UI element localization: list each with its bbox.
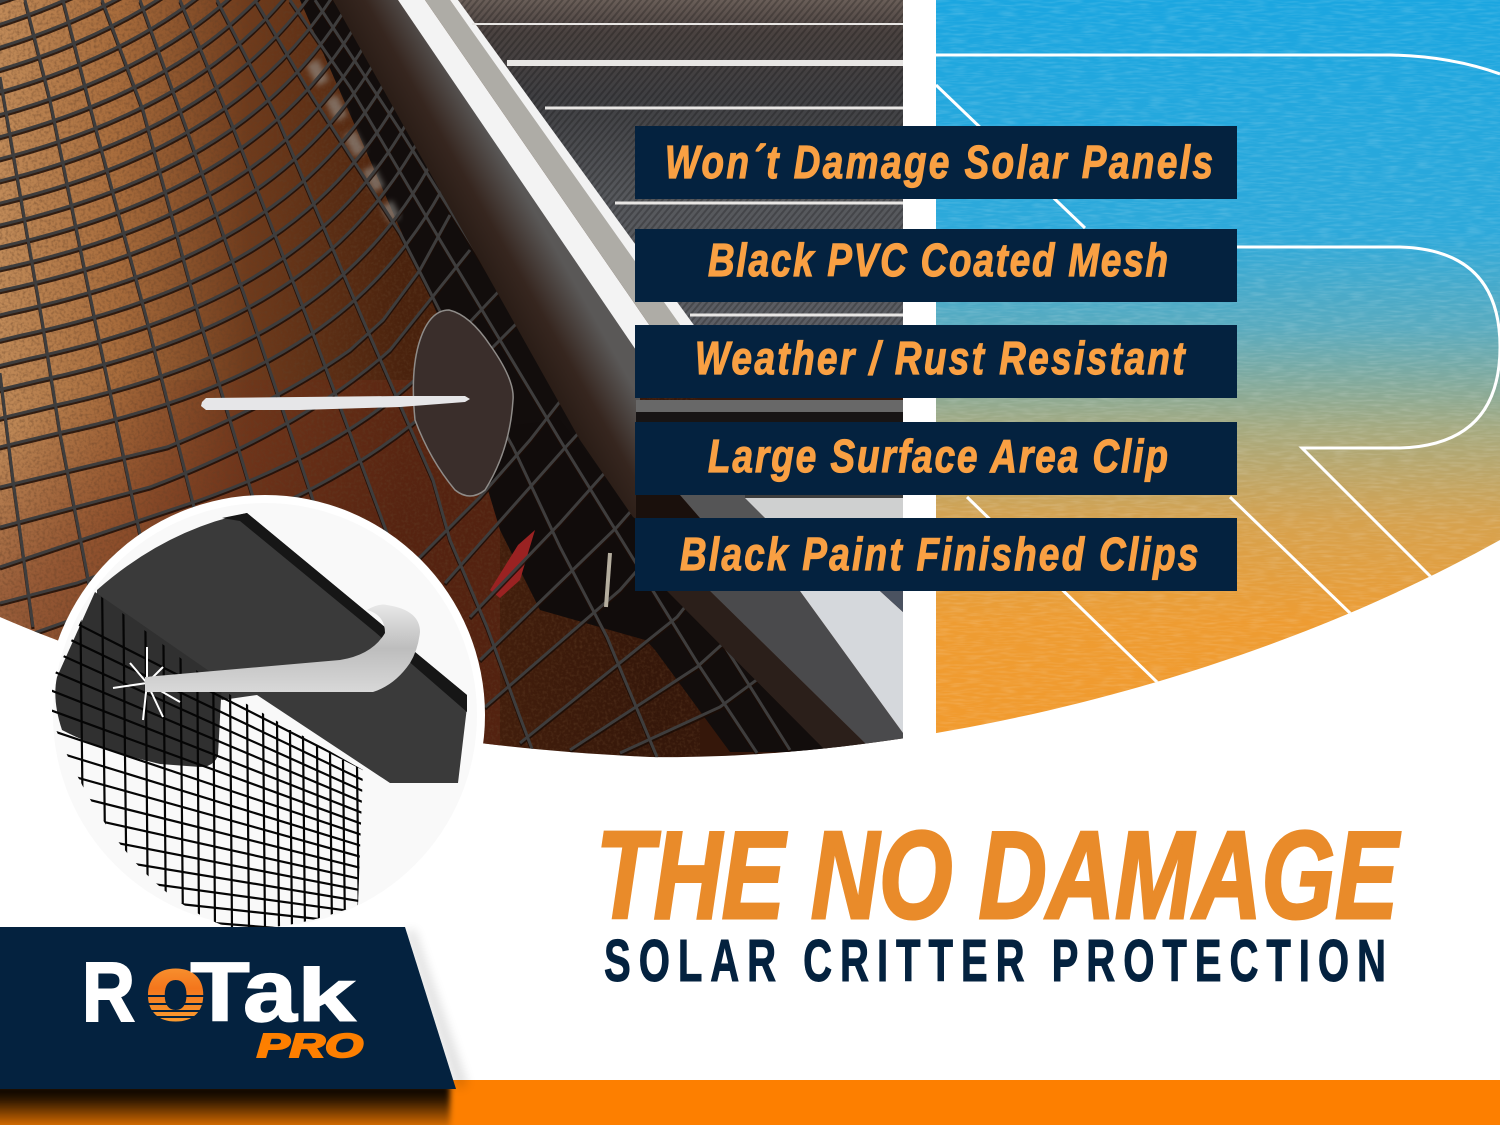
feature: black paint finished clips: Black Paint Finished Clips xyxy=(680,528,1198,580)
logo banner xyxy=(0,927,456,1089)
feature: won't damage solar panels: Won´t Damage Solar Panels xyxy=(665,136,1213,188)
photo: mesh on roof with solar panel xyxy=(0,0,1500,780)
panel edge xyxy=(97,513,467,783)
feature: black pvc coated mesh xyxy=(635,229,1237,302)
bottom orange bar xyxy=(0,1080,1500,1125)
banner shadow xyxy=(0,930,468,1125)
panel: blue to orange gradient xyxy=(936,0,1500,780)
subheadline: SOLAR CRITTER PROTECTION xyxy=(604,927,1386,994)
black shadow band under the gutter xyxy=(300,0,830,752)
logo wordmark: T xyxy=(190,945,250,1039)
gutter band xyxy=(333,0,640,522)
logo PRO: PRO xyxy=(257,1027,363,1064)
decorative white logo outline xyxy=(936,55,1500,685)
panel grid lines xyxy=(472,24,903,315)
clip pin xyxy=(201,396,470,410)
logo wordmark: o xyxy=(144,935,207,1042)
inset circle: clip illustration xyxy=(45,495,485,946)
inset mesh xyxy=(52,596,363,927)
feature: won't damage solar panels xyxy=(635,126,1237,199)
white gap column xyxy=(903,0,936,780)
wire mesh shadow xyxy=(0,0,790,759)
logo wordmark: a xyxy=(243,941,298,1040)
feature: large surface area clip: Large Surface Area Clip xyxy=(708,430,1168,482)
feature: weather / rust resistant xyxy=(635,325,1237,398)
wire mesh xyxy=(0,0,790,757)
bent clip hook xyxy=(145,605,420,692)
red debris xyxy=(490,530,535,598)
gutter lower return xyxy=(606,400,903,752)
panel frame strips xyxy=(398,0,668,356)
wet patches xyxy=(312,62,395,220)
solar panel surface xyxy=(452,0,903,325)
mounting pad xyxy=(55,592,222,767)
logo wordmark xyxy=(82,935,356,1042)
clip disc on the mesh xyxy=(413,310,513,496)
feature: black pvc coated mesh: Black PVC Coated Mesh xyxy=(708,234,1168,286)
feature list xyxy=(635,126,1237,591)
feature: weather / rust resistant: Weather / Rust Resistant xyxy=(695,332,1186,384)
feature: black paint finished clips xyxy=(635,518,1237,591)
logo wordmark: k xyxy=(297,953,356,1037)
feature: large surface area clip xyxy=(635,422,1237,495)
logo wordmark: R xyxy=(82,945,135,1039)
clip star spikes xyxy=(113,647,180,720)
